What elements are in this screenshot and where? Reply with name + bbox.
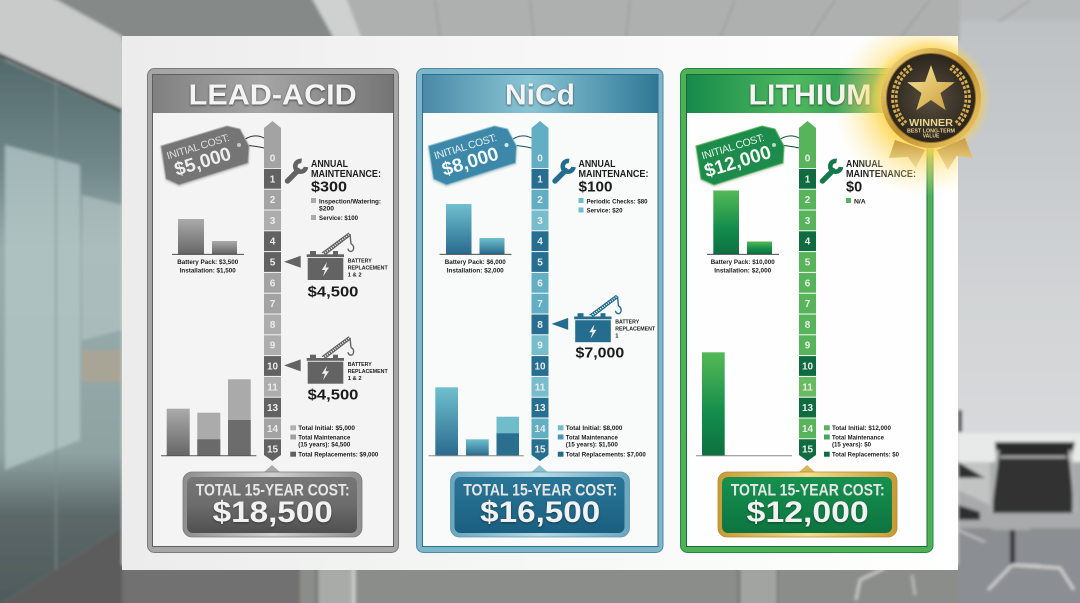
price tag: initial cost: $5,000 [172,144,234,181]
timeline: 8 [537,320,543,331]
timeline: 6 [537,278,543,289]
price tag: initial cost [696,126,799,185]
total cost box [450,465,630,537]
price tag: initial cost: INITIAL COST: [700,132,766,162]
legend: Total Maintenance [566,434,618,441]
annual maintenance [578,159,648,215]
winner medal: WINNER [909,118,954,129]
bar chart: 15-year totals [696,352,792,456]
price tag: initial cost: INITIAL COST: [165,132,231,162]
timeline: 3 [805,216,811,227]
panel frame [680,68,933,552]
timeline: 13 [534,403,546,414]
bar chart: initial cost breakdown: Installation: $1,500 [180,268,236,275]
timeline: 0 [537,154,543,164]
timeline: 13 [802,403,813,414]
legend [824,425,899,459]
battery replacement year 5: REPLACEMENT [348,265,388,271]
timeline: 10 [802,362,813,372]
battery replacement year 10: $4,500 [308,388,358,404]
timeline [532,121,548,461]
price tag: initial cost: INITIAL COST: [433,132,498,162]
timeline: 6 [270,278,276,289]
panel: nicd [416,68,663,552]
timeline: 9 [270,341,276,352]
timeline: 0 [270,154,276,164]
annual maintenance: Service: $100 [319,215,358,222]
total cost box: TOTAL 15-YEAR COST: [196,482,350,500]
bar chart: initial cost breakdown [440,204,512,275]
annual maintenance: Periodic Checks: $80 [586,198,648,205]
timeline: 2 [270,195,276,206]
bar chart: initial cost breakdown: Battery Pack: $10,000 [711,259,775,266]
legend: Total Replacements: $0 [832,452,899,459]
winner medal: BEST LONG-TERM [907,128,955,134]
legend: Total Replacements: $9,000 [298,452,379,459]
timeline: 4 [270,237,276,248]
timeline: 10 [534,362,546,372]
header: nicd: NiCd [505,79,575,111]
legend: (15 years): $4,500 [298,442,351,449]
timeline: 15 [534,445,546,456]
annual maintenance [311,159,381,222]
battery replacement year 10: BATTERY [348,362,372,368]
timeline: 8 [805,320,811,331]
timeline: 9 [805,341,811,352]
timeline: 2 [805,195,811,206]
annual maintenance [846,159,916,205]
annual maintenance: Inspection/Watering: [319,198,381,205]
timeline: 14 [267,424,278,435]
icon: wrench [822,161,841,181]
bar chart: 15-year totals [161,379,256,456]
timeline: 14 [802,424,813,435]
total cost box: TOTAL 15-YEAR COST: [731,482,885,500]
price tag: initial cost: $8,000 [440,144,501,181]
annual maintenance: MAINTENANCE: [311,169,381,180]
header: lithium [687,75,927,113]
battery replacement year 5 [284,233,388,301]
timeline: 10 [267,362,278,372]
annual maintenance: ANNUAL [311,159,348,170]
legend [290,425,379,459]
annual maintenance: Service: $20 [586,208,623,215]
legend: (15 years): $0 [832,442,871,449]
timeline: 4 [537,237,543,248]
bar chart: initial cost breakdown: Installation: $2,000 [714,268,771,275]
bar chart: initial cost breakdown [172,219,244,275]
legend: Total Initial: $12,000 [832,425,891,432]
battery replacement year 5: 1 & 2 [348,273,362,279]
total cost box: $18,500 [213,496,333,529]
display board [122,36,958,570]
panel frame [148,68,398,552]
timeline: 11 [535,382,546,393]
panel frame [416,68,663,552]
timeline: 13 [267,403,278,414]
battery replacement year 10 [284,337,388,404]
icon: wrench [555,161,574,181]
price tag: initial cost [428,126,532,185]
icon: wrench [288,161,306,181]
timeline: 0 [805,154,811,164]
header: nicd [423,75,658,113]
legend: Total Maintenance [832,434,884,441]
annual maintenance: MAINTENANCE: [846,169,916,180]
annual maintenance: MAINTENANCE: [578,169,648,180]
winner medal [836,36,990,195]
price tag: initial cost [161,126,264,185]
annual maintenance: N/A [854,198,866,205]
battery replacement year 10: 1 & 2 [348,376,362,382]
timeline: 7 [270,299,276,310]
timeline: 7 [537,299,543,310]
timeline: 3 [537,216,543,227]
total cost box: $16,500 [480,496,600,529]
bar chart: initial cost breakdown: Battery Pack: $3,500 [177,259,238,266]
timeline: 5 [270,258,276,268]
timeline: 6 [805,278,811,289]
battery replacement year 10: REPLACEMENT [348,369,388,375]
timeline: 1 [805,174,811,185]
battery replacement year 8: REPLACEMENT [615,326,656,332]
timeline: 3 [270,216,276,227]
timeline: 8 [270,320,276,331]
timeline: 5 [537,258,543,268]
total cost box [718,465,897,537]
bar chart: initial cost breakdown: Battery Pack: $6,000 [445,259,506,266]
bar chart: initial cost breakdown: Installation: $2,000 [447,268,504,275]
timeline: 14 [534,424,546,435]
timeline: 2 [537,195,543,206]
annual maintenance: $0 [846,180,862,196]
timeline: 15 [802,445,813,456]
legend: Total Initial: $8,000 [566,425,623,432]
battery replacement year 8: $7,000 [576,345,624,361]
bar chart: initial cost breakdown [707,190,779,275]
annual maintenance: $300 [311,180,347,196]
price tag: initial cost: $12,000 [702,142,774,182]
header: lead-acid: LEAD-ACID [189,79,357,111]
timeline: 15 [267,445,278,456]
legend: Total Replacements: $7,000 [566,452,646,459]
timeline [799,121,816,461]
timeline: 4 [805,237,811,248]
total cost box: TOTAL 15-YEAR COST: [463,482,617,500]
battery replacement year 5: $4,500 [308,285,358,301]
total cost box: $12,000 [747,496,869,529]
bar chart: 15-year totals [428,387,524,456]
panel: lead-acid [148,68,398,552]
legend [558,425,646,459]
panel: lithium [680,68,933,552]
battery replacement year 8 [552,295,656,361]
timeline: 11 [267,382,278,393]
annual maintenance: ANNUAL [846,159,883,170]
timeline: 5 [805,258,811,268]
winner medal: VALUE [923,134,940,140]
battery replacement year 8: 1 [615,334,619,340]
annual maintenance: $100 [578,180,612,196]
legend: Total Initial: $5,000 [298,425,355,432]
total cost box [183,465,362,537]
annual maintenance: $200 [319,206,334,213]
timeline: 1 [270,174,276,185]
timeline: 9 [537,341,543,352]
header: lithium: LITHIUM [748,79,872,111]
timeline: 11 [802,382,813,393]
annual maintenance: ANNUAL [578,159,616,170]
timeline [264,121,281,461]
battery replacement year 5: BATTERY [348,258,372,264]
header: lead-acid [153,75,393,113]
battery replacement year 8: BATTERY [615,320,639,326]
legend: Total Maintenance [298,434,351,441]
timeline: 1 [537,174,543,185]
timeline: 7 [805,299,811,310]
legend: (15 years): $1,500 [566,442,618,449]
